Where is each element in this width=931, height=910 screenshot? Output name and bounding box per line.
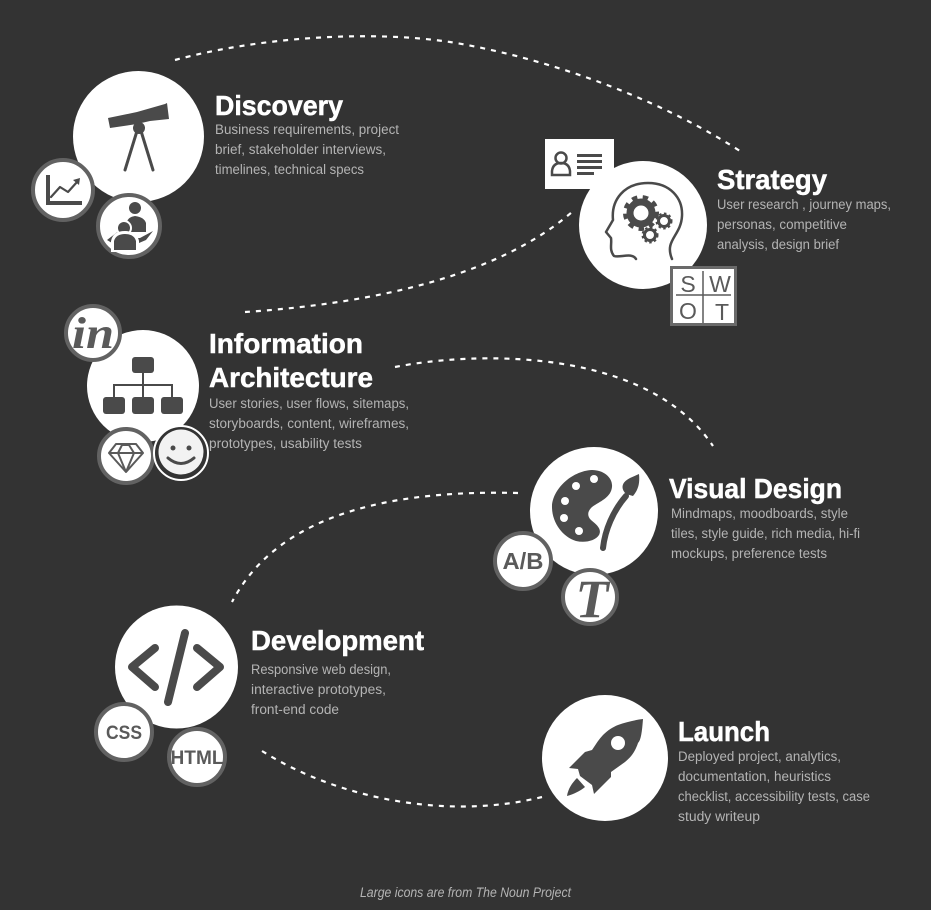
icon: typography [563,569,617,629]
text: discovery description [215,122,399,177]
text: visual design description: tiles, style guide, rich media, hi-fi [671,526,860,541]
panel: launch [542,695,870,824]
icon: HTML [169,729,225,785]
icon: sitemap [87,330,199,442]
text: strategy description: analysis, design brief [717,237,839,252]
icon: SWOT grid: O [679,298,697,324]
text: development description [251,662,391,717]
icon: A/B test [495,533,551,589]
panel: strategy [545,139,891,325]
icon: people meeting [98,195,160,257]
heading: Discovery: Discovery [215,90,343,121]
text: launch description: checklist, accessibility tests, case [678,789,870,804]
icon: Sketch diamond [99,429,153,483]
panel: information architecture [66,306,409,483]
heading: Information Architecture [209,328,373,393]
panel: visual design [495,447,860,629]
icon: rocket [542,695,668,821]
text: launch description: Deployed project, analytics, [678,749,841,764]
text: development description: front-end code [251,702,339,717]
text: strategy description: personas, competitive [717,217,847,232]
icon: SWOT grid: T [715,299,729,325]
text: visual design description: mockups, preference tests [671,546,827,561]
icon: growth chart [33,160,93,220]
icon: telescope [73,71,204,202]
panel: discovery [33,71,399,257]
heading: Information Architecture: Architecture [209,362,373,393]
icon: SWOT grid: W [709,271,731,297]
icon: typography: T [576,569,610,629]
arrow: visual design to development [232,493,518,602]
text: information architecture description: User stories, user flows, sitemaps, [209,396,409,411]
text: strategy description [717,197,891,252]
icon: InVision logo [66,306,120,360]
panel: development [96,606,424,785]
icon: InVision logo: in [72,309,114,358]
text: visual design description: Mindmaps, moodboards, style [671,506,848,521]
text: information architecture description: prototypes, usability tests [209,436,362,451]
arrow: development to launch [262,751,542,807]
icon: head with gears [579,161,707,289]
text: development description: Responsive web design, [251,662,391,677]
icon: SWOT grid: S [680,271,696,297]
text: strategy description: User research , journey maps, [717,197,891,212]
icon: HTML: HTML [170,748,224,769]
text: development description: interactive prototypes, [251,682,386,697]
arrow: discovery to strategy [175,36,743,153]
icon: code brackets [115,606,238,728]
icon: CSS [96,704,152,760]
icon: A/B test: A/B [502,548,544,574]
arrow: strategy to information architecture [245,212,572,312]
text: launch description: study writeup [678,809,760,824]
text: launch description: documentation, heuristics [678,769,831,784]
heading: Strategy: Strategy [717,164,827,195]
icon: smiley [154,426,208,480]
icon: palette and brush [530,447,658,575]
icon: persona card [545,139,614,189]
text: discovery description: Business requirements, project [215,122,399,137]
arrow: information architecture to visual design [395,358,713,446]
heading: Information Architecture: Information [209,328,363,359]
icon: CSS: CSS [106,723,142,744]
text: visual design description [671,506,860,561]
text: information architecture description [209,396,409,451]
icon: SWOT grid [672,268,736,325]
text: discovery description: timelines, technical specs [215,162,364,177]
heading: Visual Design: Visual Design [669,473,842,504]
text: discovery description: brief, stakeholder interviews, [215,142,386,157]
footer credit: Large icons are from The Noun Project [360,885,572,900]
text: launch description [678,749,870,824]
heading: Development: Development [251,625,424,656]
heading: Launch: Launch [678,716,770,747]
text: information architecture description: storyboards, content, wireframes, [209,416,409,431]
